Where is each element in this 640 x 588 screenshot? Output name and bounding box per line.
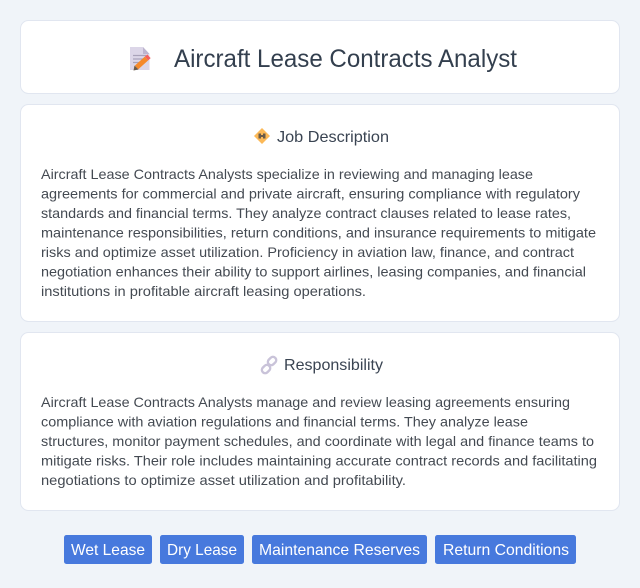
text block: responsibility: Aircraft Lease Contracts Analysts manage and review leasing agreements ensuring [41, 394, 570, 410]
heading: job description: Job Description [277, 129, 389, 146]
panel: job description [20, 104, 620, 322]
tag list [64, 535, 576, 564]
heading: responsibility: Responsibility [284, 357, 383, 374]
tag: maintenance reserves [252, 535, 427, 564]
text block: responsibility [41, 394, 597, 488]
icon: orange diamond [254, 128, 270, 144]
tag: dry lease: Dry Lease [167, 542, 237, 559]
panel: responsibility [20, 332, 620, 510]
tag: dry lease [160, 535, 244, 564]
text block: job description: maintenance responsibilities, return conditions, and insurance requirements to mitigate [41, 224, 596, 240]
text block: responsibility: negotiations to optimize asset utilization and profitability. [41, 472, 406, 488]
text block: job description [41, 166, 596, 299]
tag: maintenance reserves: Maintenance Reserves [259, 542, 420, 559]
panel: title header [20, 20, 620, 94]
tag: wet lease [64, 535, 152, 564]
text block: job description: negotiation enhances their ability to support airlines, leasing companies, and financial [41, 264, 586, 280]
tag: return conditions [435, 535, 576, 564]
text block: job description: risks and optimize asset utilization. Proficiency in aviation law, finance, and contract [41, 244, 574, 260]
tag: return conditions: Return Conditions [443, 542, 569, 559]
text block: job description: institutions in profitable aircraft leasing operations. [41, 283, 366, 299]
text block: responsibility: compliance with aviation regulations and financial terms. They analyze lease [41, 414, 528, 430]
text block: job description: agreements for commercial and private aircraft, ensuring compliance with regulatory [41, 186, 580, 202]
text block: job description: standards and financial terms. They analyze contract clauses related to lease rates, [41, 205, 571, 221]
text block: responsibility: mitigate risks. Their role includes maintaining accurate contract records and facilitating [41, 452, 597, 468]
tag: wet lease: Wet Lease [71, 542, 145, 559]
text block: responsibility: structures, monitor payment schedules, and coordinate with legal and finance teams to [41, 433, 594, 449]
title: Aircraft Lease Contracts Analyst [174, 45, 517, 73]
icon: link [261, 356, 278, 375]
icon: memo with pencil [130, 47, 150, 70]
text block: job description: Aircraft Lease Contracts Analysts specialize in reviewing and managing lease [41, 166, 533, 182]
